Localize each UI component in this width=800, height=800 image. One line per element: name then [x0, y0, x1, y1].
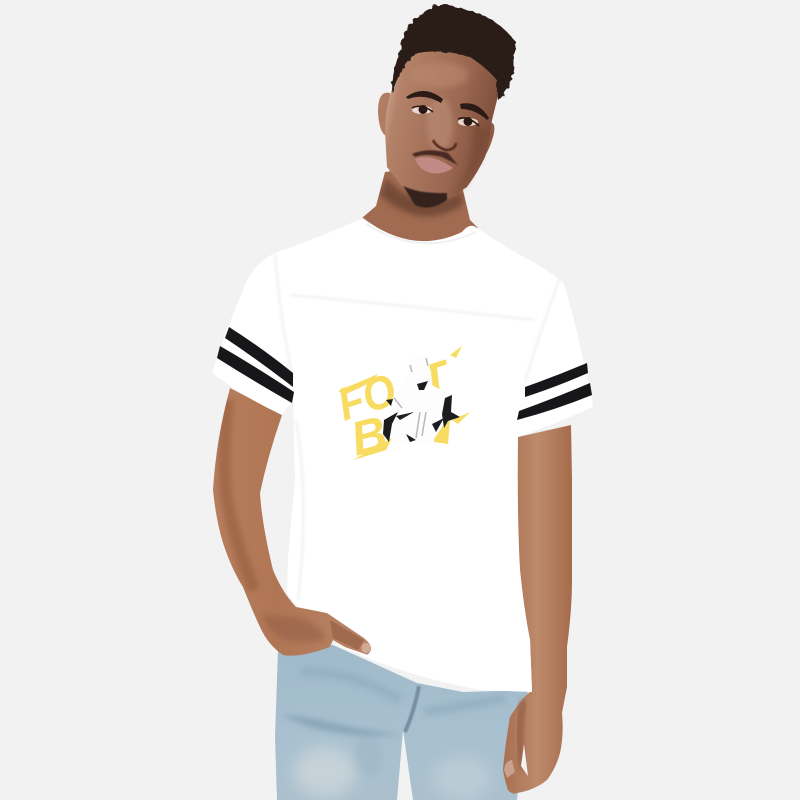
goatee: [403, 186, 447, 208]
grey sketch lines: [394, 358, 428, 438]
yellow lettering: T: [413, 349, 460, 409]
head: [378, 4, 515, 208]
left sleeve stripes: [217, 327, 294, 403]
eyes: [412, 105, 479, 126]
yellow lettering: [331, 346, 470, 467]
ear left: [378, 93, 392, 136]
nose: [433, 140, 456, 150]
shirt folds: [275, 254, 560, 600]
jeans: [275, 645, 528, 800]
moustache: [412, 150, 458, 165]
shirt body and sleeves: [212, 218, 593, 692]
arm: viewer's left with hand in pocket: [213, 388, 371, 656]
neck: [362, 171, 478, 242]
black ink strokes: [383, 381, 460, 442]
arm: viewer's right, hand at thigh: [503, 425, 572, 794]
white bull figure: [386, 355, 450, 446]
eyebrows: [406, 91, 443, 103]
yellow lettering: B: [346, 407, 392, 467]
shirt collar seam: [366, 224, 476, 243]
yellow lettering: FO: [331, 363, 402, 431]
product photo: model in t-shirt: [212, 4, 593, 800]
t-shirt graphic: football: [331, 346, 470, 467]
right sleeve stripes: [517, 363, 592, 420]
white t-shirt: [212, 218, 593, 692]
ear right: [482, 123, 494, 160]
lips: [415, 157, 453, 173]
face: [385, 40, 503, 207]
hair: [392, 4, 515, 100]
